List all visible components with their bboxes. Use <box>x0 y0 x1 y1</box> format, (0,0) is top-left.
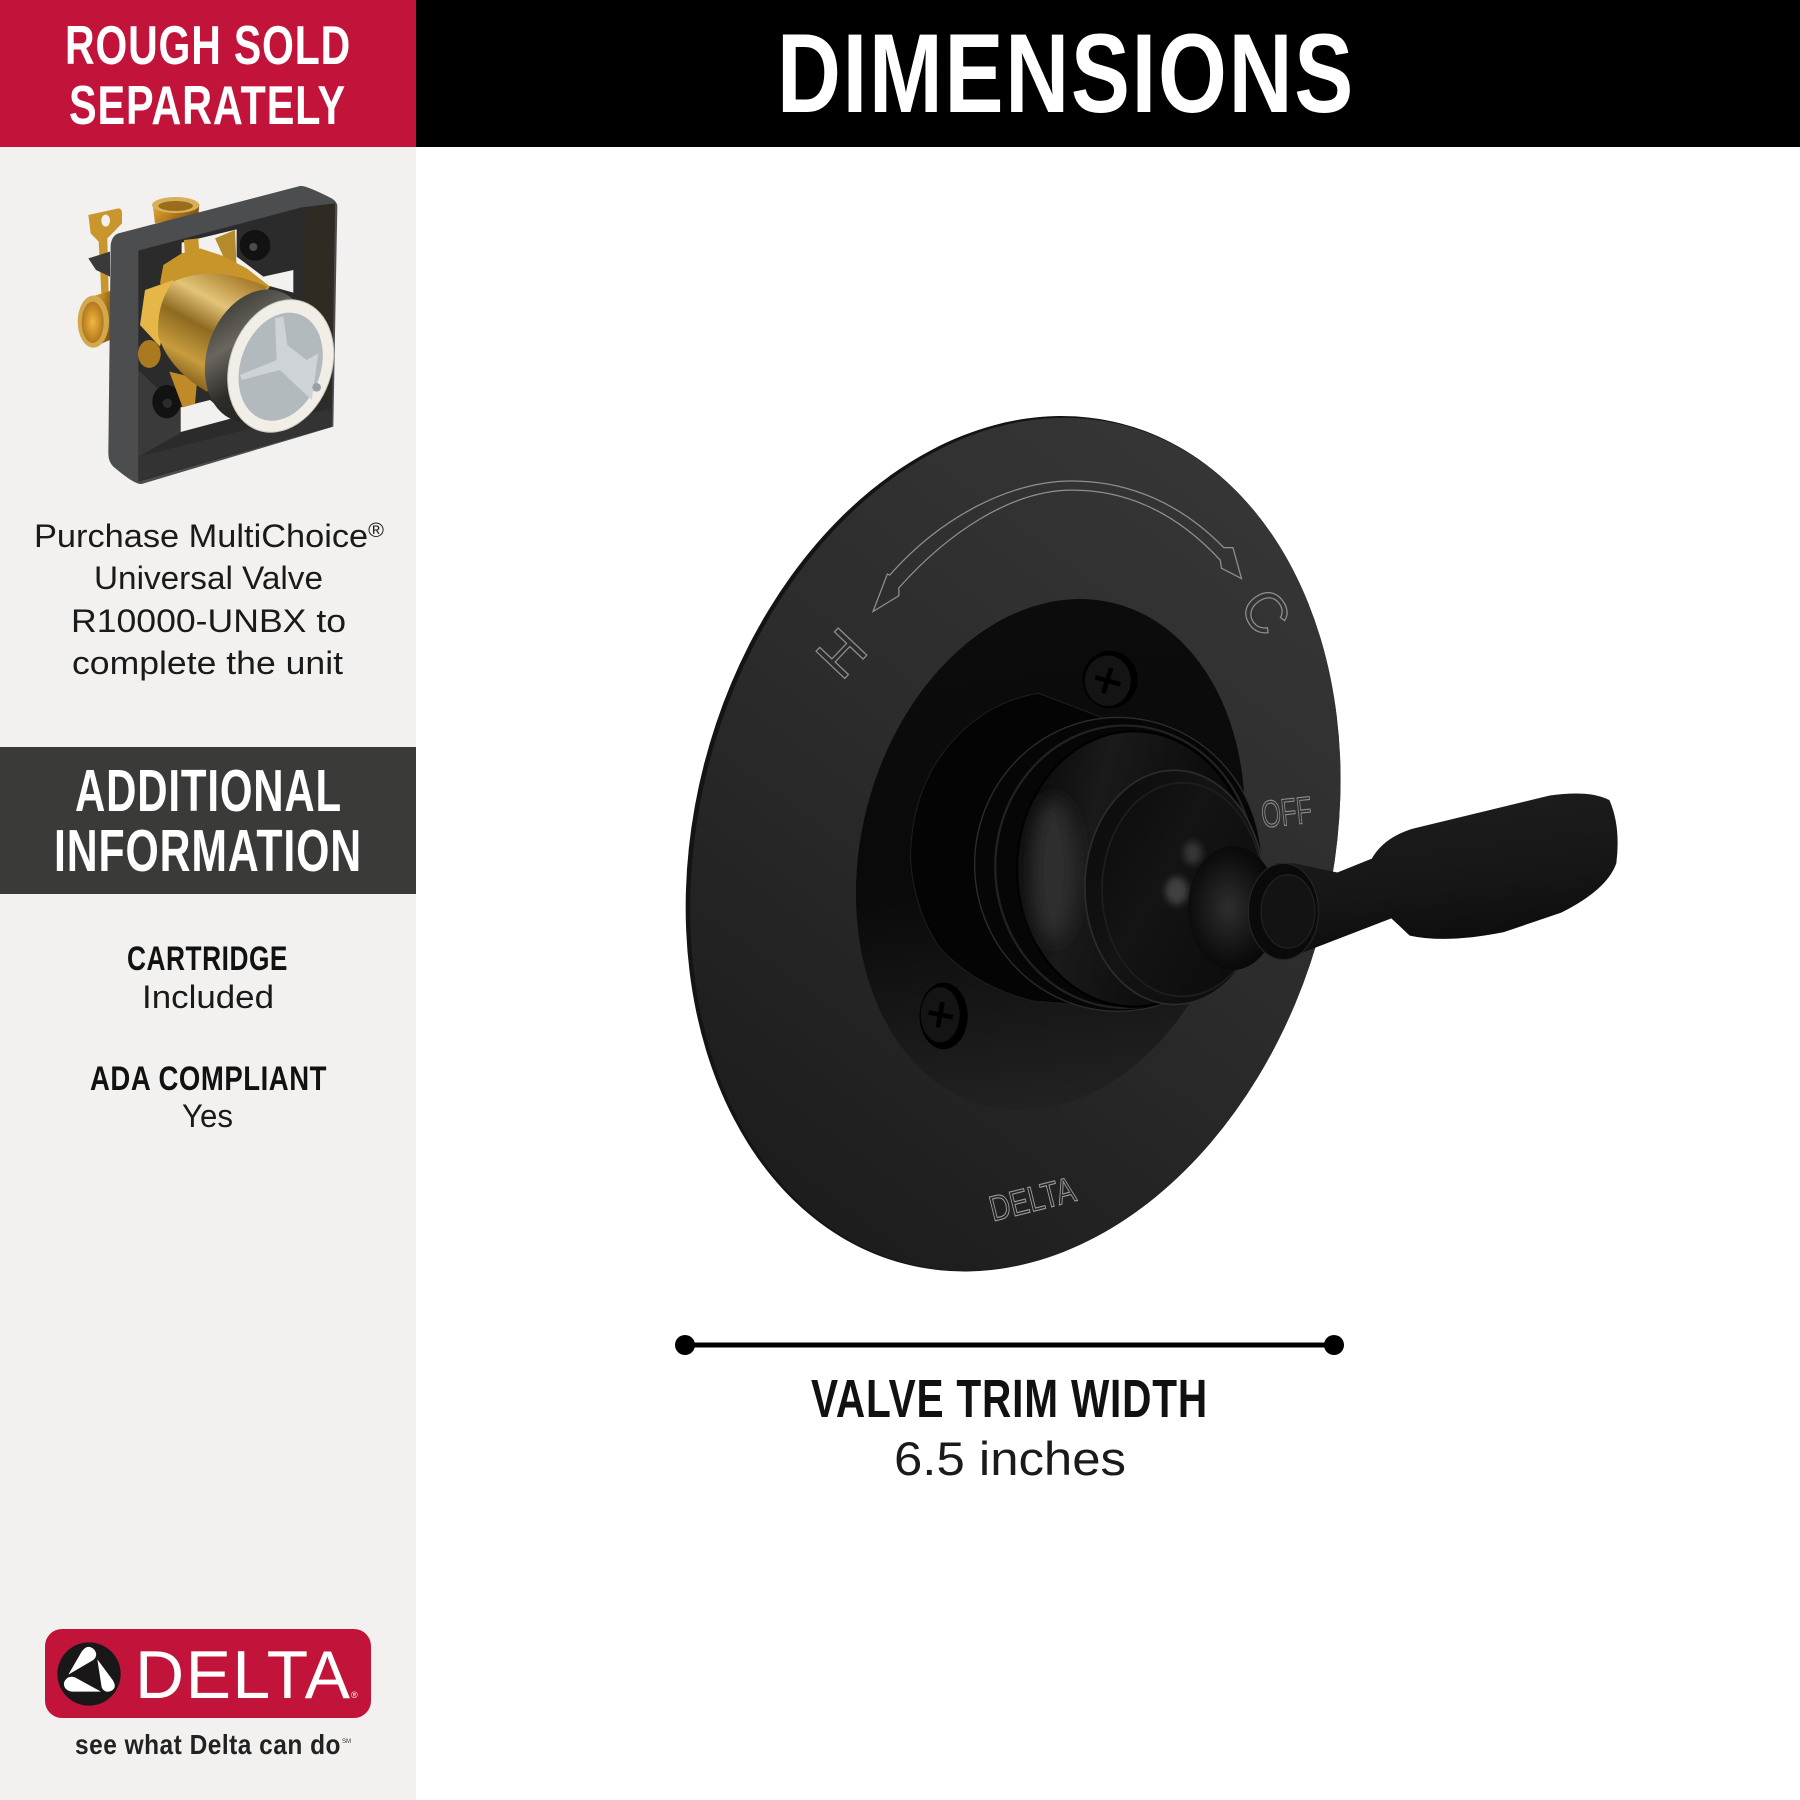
left pipe <box>93 290 113 347</box>
title: DIMENSIONS <box>777 11 1355 136</box>
dimension label <box>811 1369 1208 1485</box>
text block: purchase note: Universal Valve <box>94 560 323 596</box>
tagline: see what Delta can do <box>75 1729 341 1760</box>
engraved H: H <box>804 617 879 691</box>
banner: rough sold separately <box>0 0 416 147</box>
text block: purchase note: Purchase MultiChoice <box>34 518 345 554</box>
spec: ada compliant: Yes <box>182 1098 233 1134</box>
cap <box>1261 875 1315 948</box>
grey cap <box>224 301 337 433</box>
spec: ada compliant: ADA COMPLIANT <box>90 1060 327 1098</box>
plate <box>596 344 1430 1343</box>
header band: dimensions <box>416 0 1800 147</box>
top pipe <box>153 204 199 223</box>
frame windows <box>182 229 293 293</box>
banner: rough sold separately: SEPARATELY <box>69 74 346 136</box>
handle <box>1277 793 1618 959</box>
dimension line <box>675 1335 1344 1355</box>
sidebar background <box>0 0 416 1800</box>
spec: cartridge: CARTRIDGE <box>127 940 288 978</box>
icon: rough-in valve product <box>78 186 352 484</box>
engraved DELTA: DELTA <box>985 1169 1080 1229</box>
frame outer <box>108 186 337 484</box>
text block: purchase note: ® <box>368 520 384 542</box>
mount <box>910 693 1148 1010</box>
heading: additional information <box>0 747 416 894</box>
banner: rough sold separately: ROUGH SOLD <box>65 14 351 76</box>
bracket <box>88 208 122 293</box>
screw top <box>1083 651 1138 708</box>
tagline: SM <box>342 1739 351 1745</box>
spec: ada compliant <box>90 1060 327 1134</box>
recess <box>802 556 1298 1153</box>
logo: delta: ® <box>351 1690 358 1700</box>
hub <box>1188 846 1318 970</box>
spec: cartridge <box>127 940 288 1015</box>
text block: purchase note: R10000-UNBX to <box>71 603 346 639</box>
product: valve trim <box>596 344 1618 1343</box>
fixing screws <box>215 230 237 270</box>
spec: cartridge: Included <box>142 979 274 1015</box>
silver cylinder <box>187 275 328 437</box>
dimension label: VALVE TRIM WIDTH <box>811 1369 1208 1429</box>
text block: purchase note: complete the unit <box>72 645 343 681</box>
icon: delta emblem <box>57 1642 121 1706</box>
brass body <box>184 238 199 256</box>
silver ring <box>210 285 352 447</box>
frame interior <box>138 203 335 482</box>
text block: purchase note <box>34 518 384 681</box>
dimension label: 6.5 inches <box>894 1432 1126 1485</box>
logo: delta: DELTA <box>135 1637 351 1713</box>
dome <box>1085 770 1264 1004</box>
screw bottom <box>920 983 968 1049</box>
bell <box>975 717 1262 1011</box>
logo: delta <box>45 1629 371 1718</box>
engraved OFF: OFF <box>1259 790 1314 837</box>
heading: additional information: ADDITIONAL <box>75 758 342 824</box>
engraved arc arrow <box>873 481 1242 612</box>
engraved C: C <box>1227 577 1303 648</box>
heading: additional information: INFORMATION <box>54 818 362 884</box>
